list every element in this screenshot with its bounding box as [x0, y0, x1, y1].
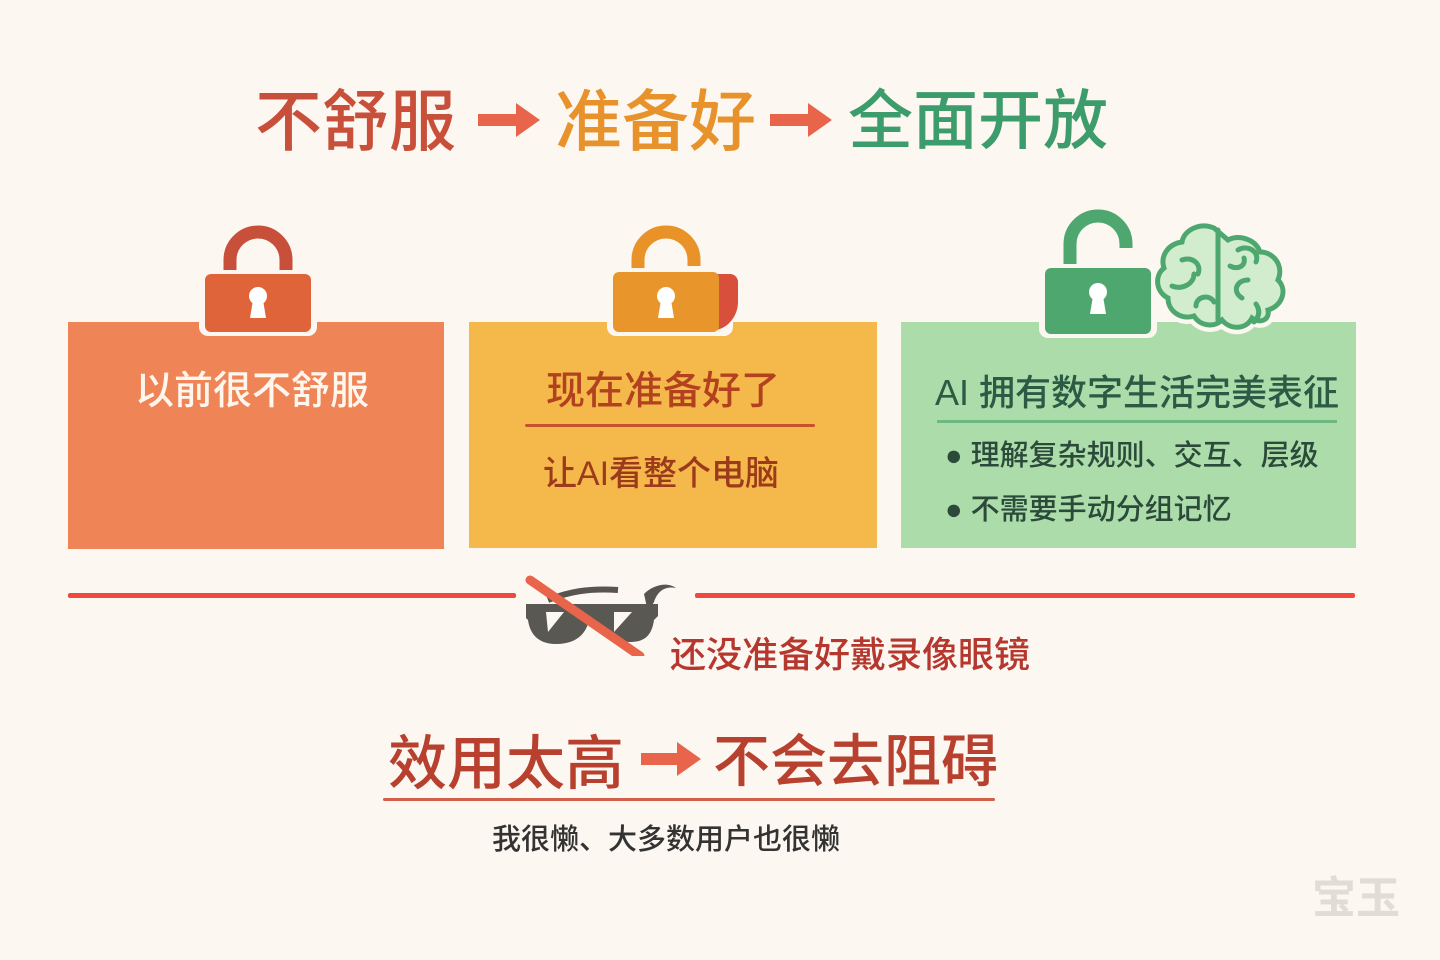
arrow 1 — [478, 103, 540, 137]
title — [255, 84, 1108, 160]
arrow 2 — [770, 103, 832, 137]
underline — [937, 420, 1337, 423]
bottom conclusion — [383, 730, 998, 801]
icon: half-open lock — [607, 226, 738, 336]
glasses caption: 还没准备好戴录像眼镜 — [670, 634, 1030, 675]
panel: before — [68, 322, 444, 549]
watermark: 宝玉 — [1312, 874, 1400, 923]
icon: crossed-out glasses — [526, 576, 676, 656]
heading: 现在准备好了 — [546, 370, 780, 413]
heading: AI 拥有数字生活完美表征 — [935, 372, 1339, 413]
conclusion text 1: 效用太高 — [388, 731, 624, 797]
subtext: 我很懒、大多数用户也很懒 — [492, 824, 840, 856]
icon: brain — [1155, 223, 1286, 334]
panel: now ready — [469, 322, 877, 548]
divider red line — [68, 593, 516, 598]
icon: green open lock — [1039, 210, 1157, 338]
panel text: 以前很不舒服 — [135, 370, 369, 413]
arrow 3 — [641, 742, 701, 776]
title word: 不舒服: 不舒服 — [255, 85, 456, 160]
title word: 全面开放: 全面开放 — [848, 84, 1108, 157]
underline — [383, 798, 995, 801]
bullet 1: ● 理解复杂规则、交互、层级 — [945, 440, 1319, 472]
title word: 准备好: 准备好 — [555, 85, 756, 160]
bullet 2: ● 不需要手动分组记忆 — [945, 494, 1232, 526]
icon: red lock — [199, 226, 317, 336]
conclusion text 2: 不会去阻碍 — [713, 730, 998, 794]
bullet list — [945, 440, 1319, 526]
subtext: 让AI看整个电脑 — [543, 455, 779, 493]
panel: fully open — [901, 322, 1356, 548]
underline — [525, 424, 815, 427]
